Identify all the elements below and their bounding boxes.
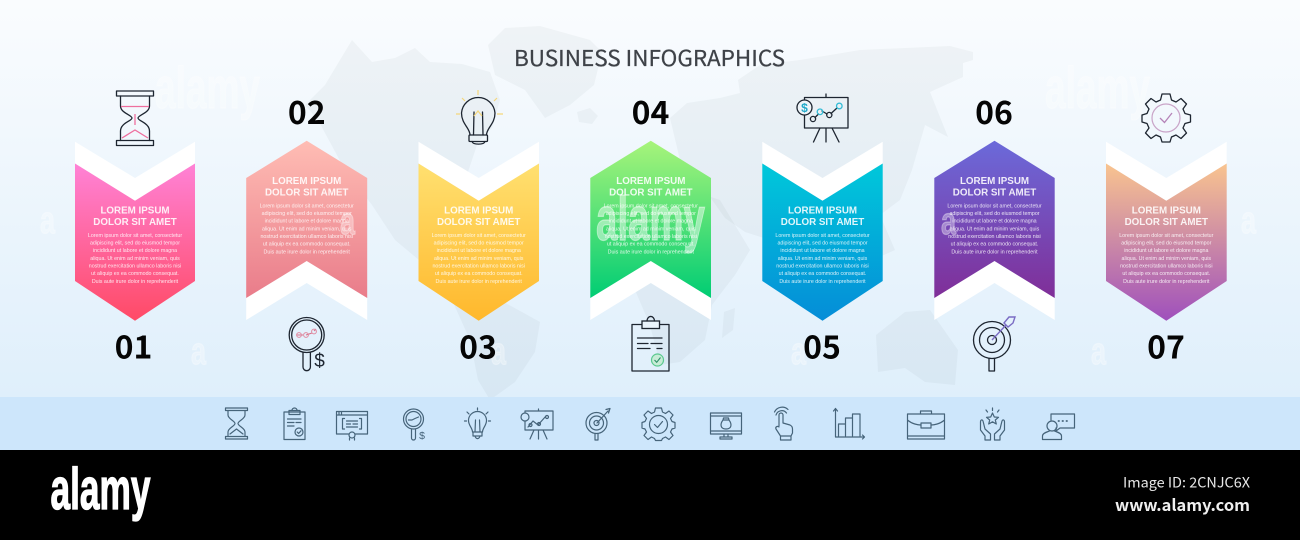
number 06: 06: [975, 88, 1013, 134]
panel: step 04: incididunt ut labore et dolore magna: [609, 219, 693, 225]
icon: presentation board: $: [801, 101, 808, 115]
panel: step 05: Lorem ipsum dolor sit amet, consectetur: [775, 233, 870, 239]
strip icon: light bulb: [464, 408, 490, 439]
panel: step 06: nostrud exercitation ullamco laboris nisi: [948, 234, 1041, 240]
footer image id: Image ID: 2CNJC6X: [1123, 472, 1250, 492]
panel: step 06: LOREM IPSUM: [960, 176, 1029, 187]
panel: step 06: DOLOR SIT AMET: [953, 188, 1036, 199]
number 01: 01: [115, 322, 152, 368]
panel: step 01: adipiscing elit, sed do eiusmod tempor: [90, 240, 180, 246]
panel: step 03: aliqua. Ut enim ad minim veniam, quis: [434, 256, 524, 262]
background: [0, 0, 1300, 397]
panel: step 06: a: [941, 201, 957, 243]
panel: step 03: LOREM IPSUM: [444, 206, 513, 217]
icon: gear with check: [1142, 94, 1190, 142]
panel: step 06: incididunt ut labore et dolore magna: [952, 219, 1037, 225]
panel: step 01: incididunt ut labore et dolore magna: [93, 248, 177, 254]
panel: step 02: Duis aute irure dolor in reprehenderit: [264, 249, 350, 255]
panel: step 04: ut aliquip ex ea commodo consequat.: [607, 242, 695, 248]
panel: step 06: Lorem ipsum dolor sit amet, consectetur: [947, 203, 1042, 209]
panel: step 07: aliqua. Ut enim ad minim veniam, quis: [1122, 256, 1211, 262]
panel: step 02: nostrud exercitation ullamco laboris nisi: [260, 234, 353, 240]
faint watermarks: a: [491, 331, 507, 373]
panel: step 03: [418, 142, 539, 321]
panel: step 06: adipiscing elit, sed do eiusmod tempor: [949, 211, 1040, 217]
panel: step 01: ut aliquip ex ea commodo consequat.: [91, 271, 179, 277]
panel: step 04: LOREM IPSUM: [616, 176, 685, 187]
faint watermarks: a: [1241, 200, 1257, 242]
world map silhouette: [305, 26, 973, 400]
panel: step 02: ut aliquip ex ea commodo consequat.: [263, 242, 351, 248]
panel: step 03: Duis aute irure dolor in reprehenderit: [436, 279, 522, 285]
icon: presentation board: [797, 94, 848, 142]
icon: magnifier with dollar: $: [314, 351, 325, 372]
panel: step 04: alamy: [596, 185, 705, 254]
panel: step 01: nostrud exercitation ullamco laboris nisi: [89, 264, 181, 270]
number 04: 04: [632, 88, 669, 134]
panel: step 05: [762, 142, 883, 321]
faint watermarks: a: [40, 200, 56, 242]
black footer bar: [0, 450, 1300, 540]
panel: step 04: DOLOR SIT AMET: [609, 188, 693, 199]
strip icon: magnifier: $: [419, 430, 425, 442]
strip icon: person with chat bubble: [1042, 414, 1074, 440]
panel: step 05: Duis aute irure dolor in reprehenderit: [779, 279, 866, 285]
strip icon: gear: [642, 408, 675, 440]
panel: step 05: LOREM IPSUM: [788, 206, 857, 217]
panel: step 03: ut aliquip ex ea commodo consequat.: [435, 271, 523, 277]
strip icon: clipboard: [284, 408, 305, 440]
strip icon: monitor with money bag: [710, 413, 742, 439]
panel: step 03: incididunt ut labore et dolore magna: [437, 248, 521, 254]
icon: light bulb: [456, 90, 503, 144]
faint watermarks: a: [191, 331, 207, 373]
panel: step 05: ut aliquip ex ea commodo consequat.: [779, 271, 866, 277]
faint watermarks: alamy: [1045, 56, 1150, 121]
panel: step 07: ut aliquip ex ea commodo consequat.: [1122, 271, 1210, 277]
panel: step 05: DOLOR SIT AMET: [781, 217, 864, 228]
icon: hourglass: [116, 91, 154, 146]
panel: step 05: nostrud exercitation ullamco laboris nisi: [776, 264, 869, 270]
faint watermarks: a: [791, 331, 807, 373]
number 07: 07: [1147, 322, 1185, 368]
panel: step 05: incididunt ut labore et dolore magna: [780, 248, 865, 254]
panel: step 04: [590, 141, 711, 320]
faint watermarks: alamy: [155, 56, 260, 121]
panel: step 06: [340, 141, 1055, 320]
number 03: 03: [459, 322, 497, 368]
footer url: www.alamy.com: [1115, 492, 1250, 516]
icon: clipboard: [632, 316, 669, 371]
panel: step 02: adipiscing elit, sed do eiusmod tempor: [262, 211, 352, 217]
panel: step 04: Lorem ipsum dolor sit amet, consectetur: [604, 203, 698, 209]
panel: step 07: adipiscing elit, sed do eiusmod tempor: [1121, 240, 1212, 246]
panel: step 01: aliqua. Ut enim ad minim veniam, quis: [90, 256, 180, 262]
panel: step 04: aliqua. Ut enim ad minim veniam, quis: [606, 226, 696, 232]
panel: step 02: aliqua. Ut enim ad minim veniam, quis: [262, 226, 352, 232]
strip icon: hands with star: [980, 408, 1004, 440]
panel: step 06: aliqua. Ut enim ad minim veniam, quis: [950, 226, 1040, 232]
panel: step 01: LOREM IPSUM: [100, 206, 170, 217]
panel: step 06: a: [340, 201, 356, 243]
strip icon: magnifier: [404, 409, 425, 442]
strip icon: bar chart: [834, 408, 864, 439]
panel: step 04: Duis aute irure dolor in reprehenderit: [608, 249, 694, 255]
panel: step 01: [75, 142, 195, 321]
icon: target with arrow: [974, 317, 1015, 371]
panel: step 02: LOREM IPSUM: [272, 176, 341, 187]
icon: magnifier with dollar: [289, 318, 325, 372]
panel: step 04: nostrud exercitation ullamco laboris nisi: [605, 234, 697, 240]
panel: step 05: aliqua. Ut enim ad minim veniam, quis: [778, 256, 868, 262]
panel: step 01: Duis aute irure dolor in reprehenderit: [92, 279, 179, 285]
panel: step 07: incididunt ut labore et dolore magna: [1124, 248, 1208, 254]
panel: step 07: LOREM IPSUM: [1132, 206, 1201, 217]
panel: step 07: nostrud exercitation ullamco laboris nisi: [1120, 264, 1213, 270]
panel: step 02: Lorem ipsum dolor sit amet, consectetur: [260, 203, 354, 209]
panel: step 03: Lorem ipsum dolor sit amet, consectetur: [432, 233, 526, 239]
panel: step 02: DOLOR SIT AMET: [265, 188, 348, 199]
panel: step 02: incididunt ut labore et dolore magna: [265, 219, 349, 225]
panel: step 03: nostrud exercitation ullamco laboris nisi: [432, 264, 525, 270]
panel: step 06: ut aliquip ex ea commodo consequat.: [951, 242, 1038, 248]
number 02: 02: [288, 88, 326, 134]
panel: step 07: [1106, 142, 1227, 321]
panel: step 07: DOLOR SIT AMET: [1125, 217, 1208, 228]
panel: step 07: Duis aute irure dolor in reprehenderit: [1123, 279, 1210, 285]
faint watermarks: a: [1091, 331, 1107, 373]
strip icon: touch hand: [774, 407, 792, 440]
strip icon: web certificate: [336, 412, 368, 440]
footer logo: alamy: [50, 457, 150, 522]
panel: step 06: Duis aute irure dolor in reprehenderit: [951, 249, 1038, 255]
number 05: 05: [803, 322, 841, 368]
icon strip band: [0, 397, 1300, 450]
title: BUSINESS INFOGRAPHICS: [514, 41, 785, 73]
strip icon: briefcase: [908, 411, 944, 439]
panel: step 02: [246, 141, 367, 320]
panel: step 01: DOLOR SIT AMET: [93, 217, 177, 228]
strip icon: target: [586, 408, 610, 440]
strip icon: presentation board: [521, 409, 553, 439]
faint watermarks: [40, 56, 1257, 373]
strip icon: hourglass: [226, 408, 248, 439]
panel: step 05: adipiscing elit, sed do eiusmod tempor: [777, 240, 868, 246]
panel: step 04: adipiscing elit, sed do eiusmod tempor: [606, 211, 696, 217]
panel: step 03: adipiscing elit, sed do eiusmod tempor: [434, 240, 524, 246]
panel: step 07: Lorem ipsum dolor sit amet, consectetur: [1119, 233, 1214, 239]
panel: step 03: DOLOR SIT AMET: [437, 217, 520, 228]
panel: step 01: Lorem ipsum dolor sit amet, consectetur: [88, 233, 182, 239]
